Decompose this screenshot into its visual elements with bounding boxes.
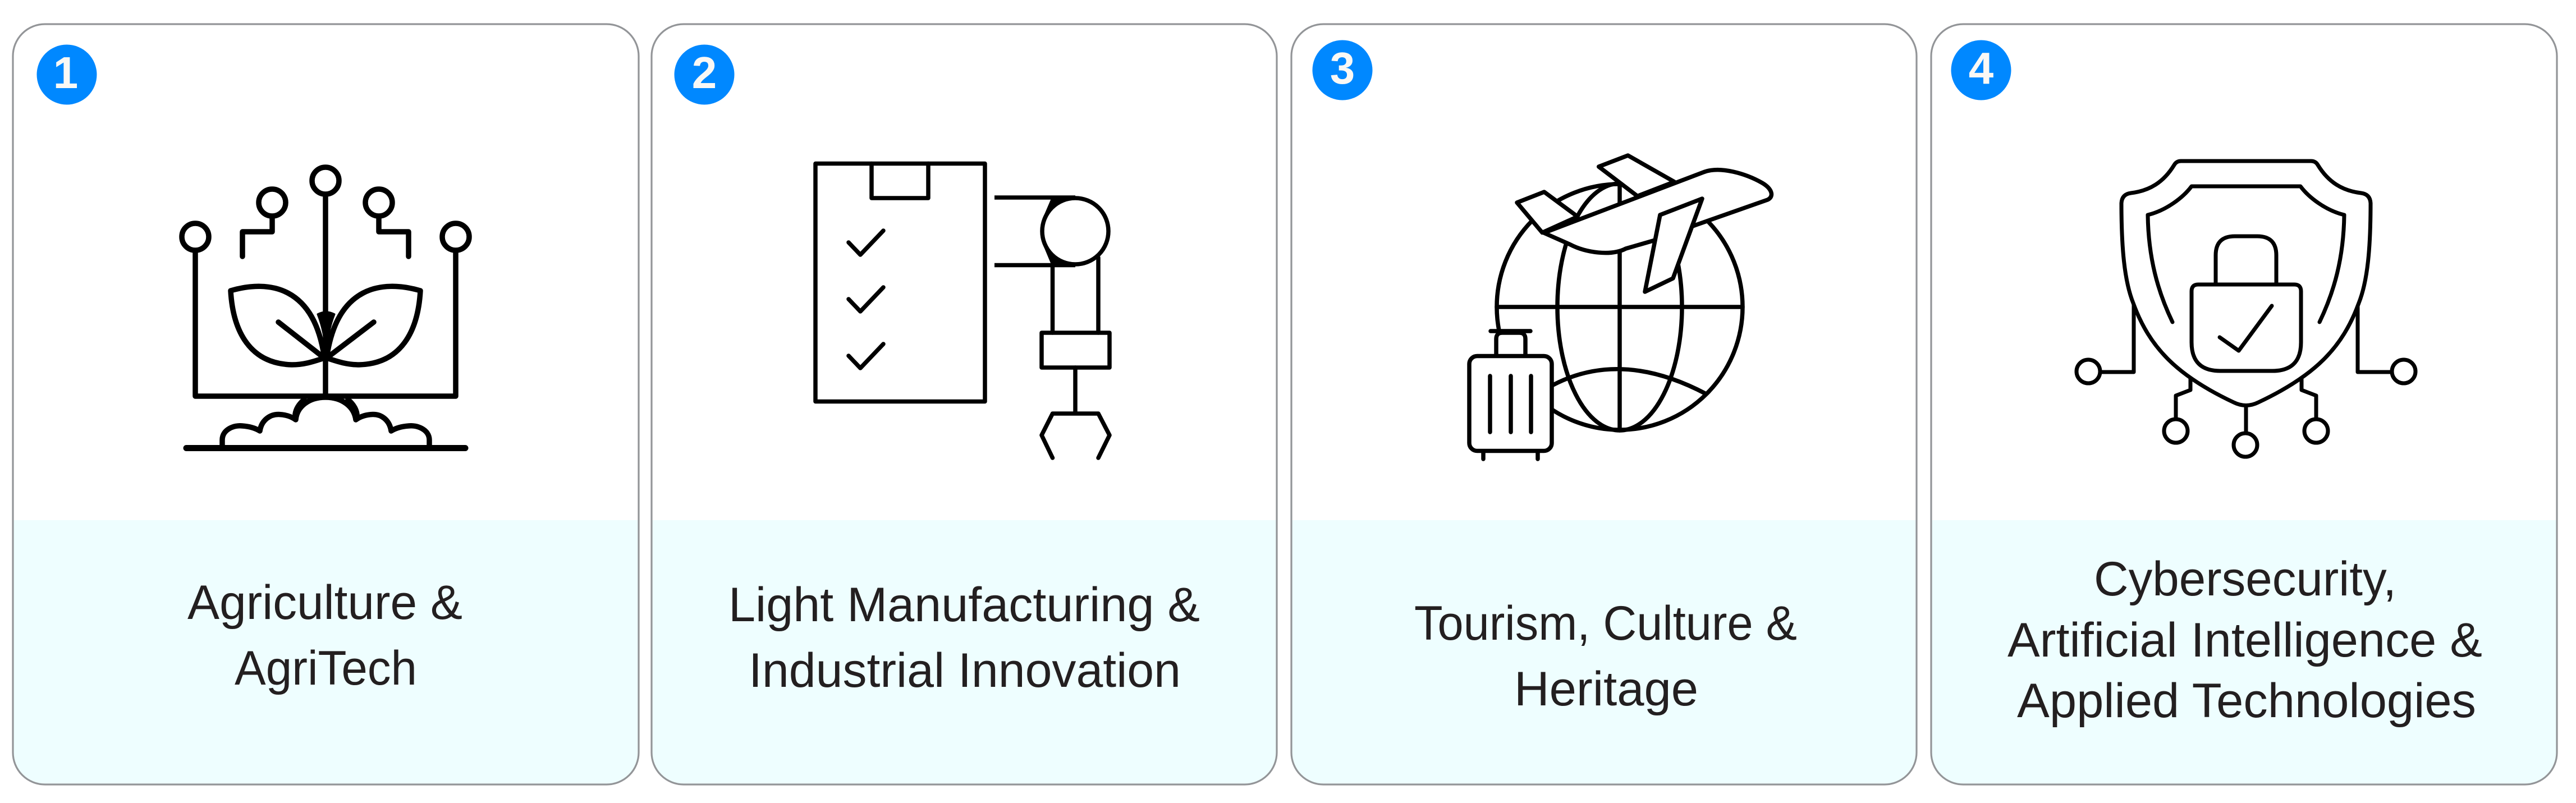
number badge 3 xyxy=(1312,40,1373,100)
panel tinted footer xyxy=(1931,520,2557,784)
number badge 1 xyxy=(37,45,97,104)
label: Cybersecurity, Artificial Intelligence & Applied Technologies: Cybersecurity, xyxy=(2094,552,2396,606)
panel: Tourism, Culture and Heritage xyxy=(1291,24,1917,784)
number badge 4: 4 xyxy=(1969,43,1994,93)
label: Agriculture & AgriTech xyxy=(187,576,462,695)
number badge 1: 1 xyxy=(53,48,78,98)
icon: globe, airplane and suitcase xyxy=(1469,155,1771,459)
panel border xyxy=(1291,24,1917,784)
label: Cybersecurity, Artificial Intelligence & Applied Technologies: Applied Technologies xyxy=(2017,674,2476,728)
panel border xyxy=(1931,24,2557,784)
label: Light Manufacturing & Industrial Innovation xyxy=(728,578,1200,698)
panel: Cybersecurity, Artificial Intelligence and Applied Technologies xyxy=(1931,24,2557,784)
label: Light Manufacturing & Industrial Innovation: Industrial Innovation xyxy=(749,644,1181,698)
panel: Agriculture and AgriTech xyxy=(13,24,639,784)
label: Light Manufacturing & Industrial Innovation: Light Manufacturing & xyxy=(728,578,1200,632)
airplane xyxy=(1517,155,1771,292)
number badge 4 xyxy=(1951,40,2011,100)
panel border xyxy=(13,24,639,784)
panel tinted footer xyxy=(652,520,1277,784)
label: Agriculture & AgriTech: AgriTech xyxy=(235,641,417,695)
panel: Light Manufacturing and Industrial Innovation xyxy=(652,24,1277,784)
panel tinted footer xyxy=(13,520,639,784)
number badge 2 xyxy=(675,45,734,104)
icon: sprouting plant with circuit nodes xyxy=(182,167,469,448)
suitcase xyxy=(1469,331,1552,459)
label: Tourism, Culture & Heritage: Tourism, Culture & xyxy=(1414,596,1797,650)
icon: shield, padlock and circuit nodes xyxy=(2077,161,2415,457)
number badge 2: 2 xyxy=(692,48,717,98)
number badge 3: 3 xyxy=(1330,43,1355,93)
icon: checklist clipboard and robotic arm xyxy=(815,164,1110,458)
label: Tourism, Culture & Heritage: Heritage xyxy=(1514,662,1698,716)
panel tinted footer xyxy=(1291,520,1917,784)
label: Tourism, Culture & Heritage xyxy=(1414,596,1797,716)
label: Agriculture & AgriTech: Agriculture & xyxy=(187,576,462,630)
label: Cybersecurity, Artificial Intelligence & Applied Technologies xyxy=(2007,552,2482,728)
label: Cybersecurity, Artificial Intelligence & Applied Technologies: Artificial Intelligence & xyxy=(2007,613,2482,667)
globe xyxy=(1497,183,1743,430)
panel border xyxy=(652,24,1277,784)
